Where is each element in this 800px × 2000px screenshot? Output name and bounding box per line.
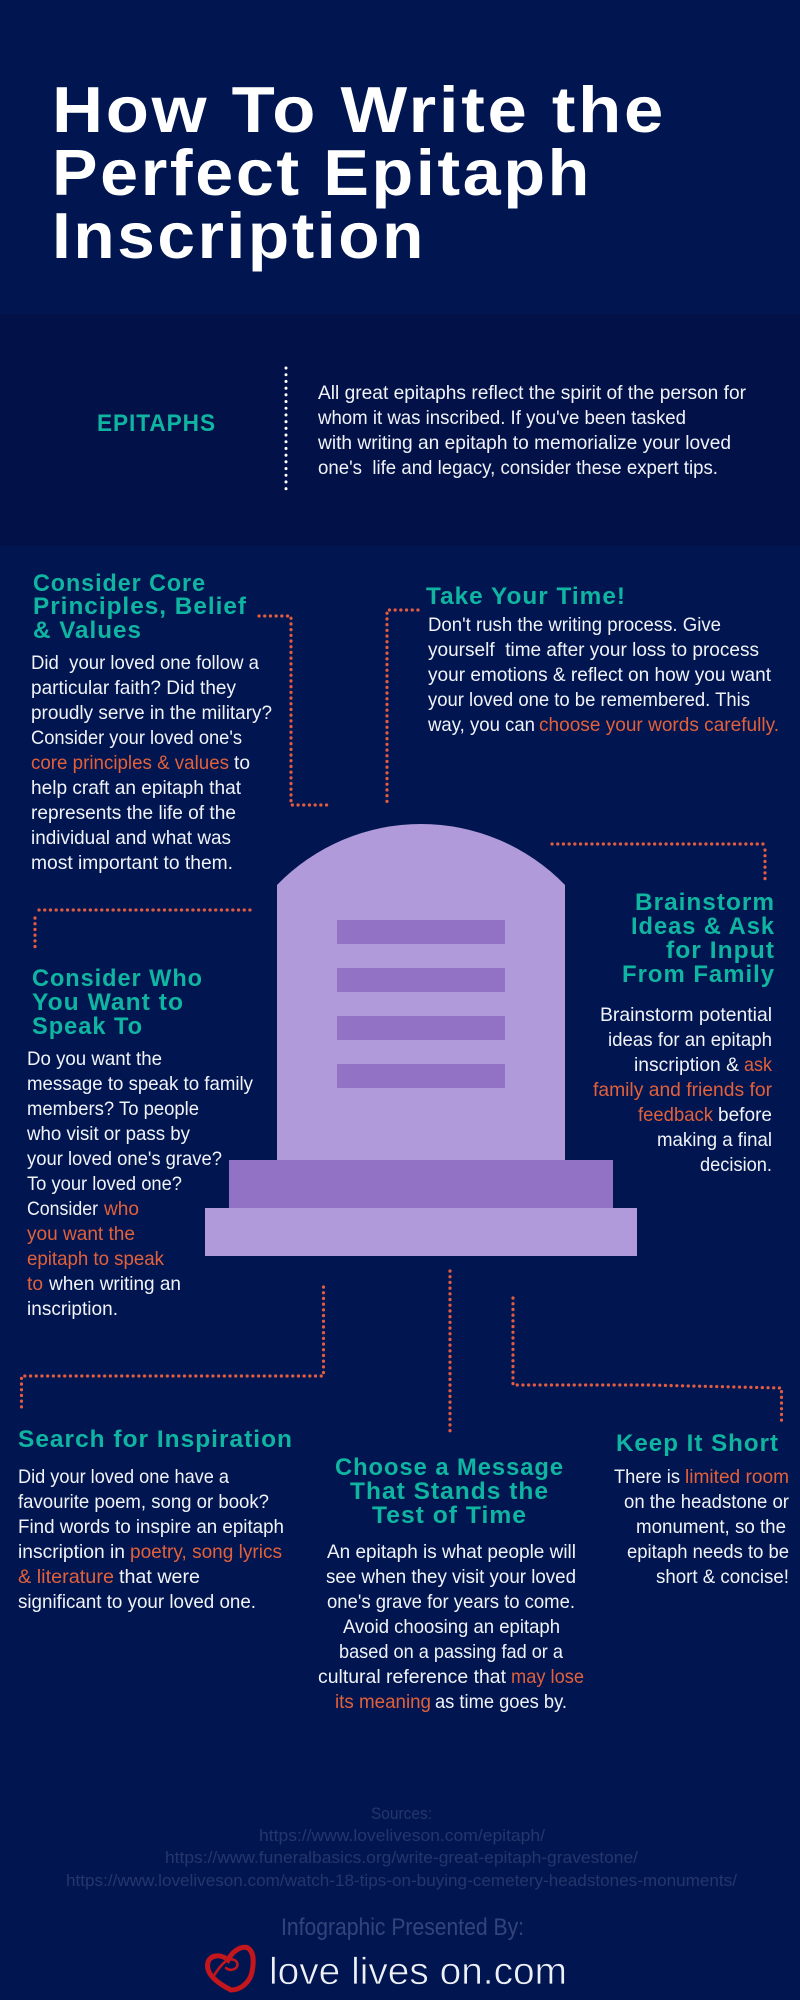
- text: test of time body: as time goes by.: [435, 1691, 567, 1713]
- text: keep it short body: monument, so the: [636, 1516, 786, 1538]
- heading: keep it short: Keep It Short: [616, 1430, 779, 1457]
- text: who to speak to body: To your loved one?: [27, 1173, 182, 1195]
- heading: test of time: [335, 1454, 564, 1529]
- heading: search for inspiration: Search for Inspiration: [18, 1426, 293, 1453]
- text: test of time body: one's grave for years to come.: [327, 1591, 575, 1613]
- heading: core principles: & Values: [33, 617, 142, 644]
- text: who to speak to body: Consider: [27, 1198, 98, 1220]
- text: core principles body: represents the life of the: [31, 802, 236, 824]
- text: who to speak to body: to: [27, 1273, 43, 1295]
- text: search for inspiration body: poetry, song lyrics: [130, 1541, 282, 1563]
- text: test of time body: may lose: [511, 1666, 584, 1688]
- text: sources: https://www.loveliveson.com/epitaph/: [259, 1826, 545, 1845]
- text: take your time body: yourself time after your loss to process: [428, 639, 759, 661]
- title: Inscription: [52, 199, 426, 272]
- text: core principles body: [31, 652, 272, 874]
- arrow: brainstorm connector: [552, 844, 768, 883]
- text: core principles body: proudly serve in the military?: [31, 702, 272, 724]
- heading: test of time: Test of Time: [372, 1502, 527, 1529]
- text: core principles body: most important to them.: [31, 852, 233, 874]
- icon: headstone: [205, 824, 637, 1256]
- text: who to speak to body: when writing an: [48, 1273, 181, 1295]
- heading: test of time: Choose a Message: [335, 1454, 564, 1481]
- text: wordmark: love lives on.com: [269, 1951, 567, 1993]
- text: search for inspiration body: & literature: [18, 1566, 114, 1588]
- text: who to speak to body: who visit or pass by: [26, 1123, 190, 1145]
- text: core principles body: core principles & values: [31, 752, 229, 774]
- arrow: take your time connector: [387, 610, 418, 805]
- heading: brainstorm: Brainstorm: [635, 889, 775, 916]
- arrow: core principles connector: [259, 616, 329, 805]
- text: search for inspiration body: significant to your loved one.: [18, 1591, 256, 1613]
- text: sources: Sources:: [371, 1804, 432, 1823]
- text: test of time body: its meaning: [335, 1691, 431, 1713]
- text: keep it short body: There is: [614, 1466, 680, 1488]
- logo: love lives on.com: [207, 1947, 567, 1993]
- heading: test of time: That Stands the: [350, 1478, 549, 1505]
- panel: keep it short: [513, 1298, 789, 1588]
- text: brainstorm body: family and friends for: [593, 1079, 772, 1101]
- text: sources: https://www.loveliveson.com/watch-18-tips-on-buying-cemetery-headstones-monuments/: [66, 1871, 737, 1890]
- heading: brainstorm: From Family: [622, 961, 775, 988]
- heading: who to speak to: Consider Who: [32, 965, 203, 992]
- text: presented by: Infographic Presented By:: [281, 1914, 524, 1941]
- heading: core principles: Consider Core: [33, 570, 206, 597]
- title: How To Write the: [52, 73, 666, 146]
- text: search for inspiration body: inscription in: [18, 1541, 125, 1563]
- heading: who to speak to: Speak To: [32, 1013, 143, 1040]
- text: brainstorm body: inscription &: [634, 1054, 739, 1076]
- text: who to speak to body: you want the: [27, 1223, 135, 1245]
- text: search for inspiration body: Find words to inspire an epitaph: [18, 1516, 284, 1538]
- title: Perfect Epitaph: [52, 136, 592, 209]
- text: test of time body: Avoid choosing an epitaph: [343, 1616, 560, 1638]
- text: take your time body: your loved one to be remembered. This: [428, 689, 750, 711]
- text: core principles body: individual and what was: [31, 827, 231, 849]
- text: take your time body: Don't rush the writing process. Give: [428, 614, 721, 636]
- text: take your time body: [427, 614, 779, 736]
- text: take your time body: choose your words carefully.: [539, 714, 779, 736]
- text: search for inspiration body: that were: [119, 1566, 200, 1588]
- text: keep it short body: [614, 1466, 789, 1588]
- divider: white dotted line: [284, 368, 288, 489]
- text: search for inspiration body: favourite poem, song or book?: [18, 1491, 269, 1513]
- text: test of time body: based on a passing fad or a: [339, 1641, 563, 1663]
- text: who to speak to body: [26, 1048, 253, 1320]
- panel: brainstorm: [552, 844, 775, 1176]
- text: keep it short body: epitaph needs to be: [627, 1541, 789, 1563]
- text: who to speak to body: your loved one's grave?: [27, 1148, 222, 1170]
- text: core principles body: help craft an epitaph that: [31, 777, 242, 799]
- text: core principles body: to: [234, 752, 250, 774]
- text: brainstorm body: [593, 1004, 772, 1176]
- heading: who to speak to: [32, 965, 203, 1040]
- text: brainstorm body: making a final: [657, 1129, 772, 1151]
- text: brainstorm body: decision.: [700, 1154, 772, 1176]
- text: keep it short body: short & concise!: [656, 1566, 789, 1588]
- text: search for inspiration body: Did your loved one have a: [18, 1466, 229, 1488]
- text: intro paragraph: [317, 382, 746, 479]
- text: test of time body: see when they visit your loved: [326, 1566, 576, 1588]
- title: [52, 73, 666, 272]
- text: brainstorm body: feedback: [638, 1104, 713, 1126]
- text: sources: [66, 1804, 737, 1890]
- text: search for inspiration body: [18, 1466, 284, 1613]
- text: intro paragraph: one's life and legacy, consider these expert tips.: [318, 457, 718, 479]
- text: brainstorm body: before: [718, 1104, 772, 1126]
- text: who to speak to body: inscription.: [27, 1298, 118, 1320]
- heading: brainstorm: for Input: [666, 937, 775, 964]
- heading: core principles: [33, 570, 247, 644]
- heading: brainstorm: [622, 889, 775, 988]
- text: core principles body: particular faith? Did they: [31, 677, 236, 699]
- panel: who to speak to: [26, 910, 253, 1320]
- text: keep it short body: on the headstone or: [624, 1491, 789, 1513]
- heading: take your time: Take Your Time!: [426, 583, 626, 610]
- text: core principles body: Did your loved one follow a: [31, 652, 259, 674]
- text: brainstorm body: ideas for an epitaph: [608, 1029, 772, 1051]
- panel: intro band: [0, 314, 800, 546]
- text: keep it short body: limited room: [685, 1466, 789, 1488]
- arrow: test of time connector: [448, 1271, 452, 1435]
- text: who to speak to body: who: [103, 1198, 139, 1220]
- text: test of time body: [318, 1541, 584, 1713]
- text: intro paragraph: All great epitaphs reflect the spirit of the person for: [318, 382, 746, 404]
- text: who to speak to body: Do you want the: [27, 1048, 162, 1070]
- panel: core principles: [31, 570, 329, 874]
- heading: brainstorm: Ideas & Ask: [631, 913, 775, 940]
- icon: red heart: [207, 1947, 253, 1990]
- text: take your time body: your emotions & reflect on how you want: [428, 664, 772, 686]
- text: who to speak to body: members? To people: [27, 1098, 199, 1120]
- arrow: keep it short connector: [513, 1298, 782, 1422]
- text: who to speak to body: epitaph to speak: [27, 1248, 164, 1270]
- text: brainstorm body: ask: [744, 1054, 772, 1076]
- arrow: who to speak to connector: [35, 910, 250, 950]
- panel: take your time: [387, 583, 779, 805]
- arrow: search for inspiration connector: [22, 1287, 324, 1410]
- text: core principles body: Consider your loved one's: [31, 727, 242, 749]
- text: test of time body: An epitaph is what people will: [327, 1541, 576, 1563]
- heading: core principles: Principles, Belief: [33, 593, 247, 620]
- text: brainstorm body: Brainstorm potential: [600, 1004, 772, 1026]
- heading: who to speak to: You Want to: [32, 989, 184, 1016]
- heading: EPITAPHS: EPITAPHS: [97, 410, 216, 437]
- text: test of time body: cultural reference that: [318, 1666, 507, 1688]
- text: intro paragraph: with writing an epitaph to memorialize your loved: [317, 432, 731, 454]
- text: sources: https://www.funeralbasics.org/write-great-epitaph-gravestone/: [165, 1848, 638, 1867]
- text: take your time body: way, you can: [427, 714, 535, 736]
- panel: search for inspiration: [18, 1287, 324, 1613]
- panel: test of time: [318, 1271, 584, 1713]
- text: intro paragraph: whom it was inscribed. If you've been tasked: [317, 407, 686, 429]
- text: who to speak to body: message to speak to family: [27, 1073, 253, 1095]
